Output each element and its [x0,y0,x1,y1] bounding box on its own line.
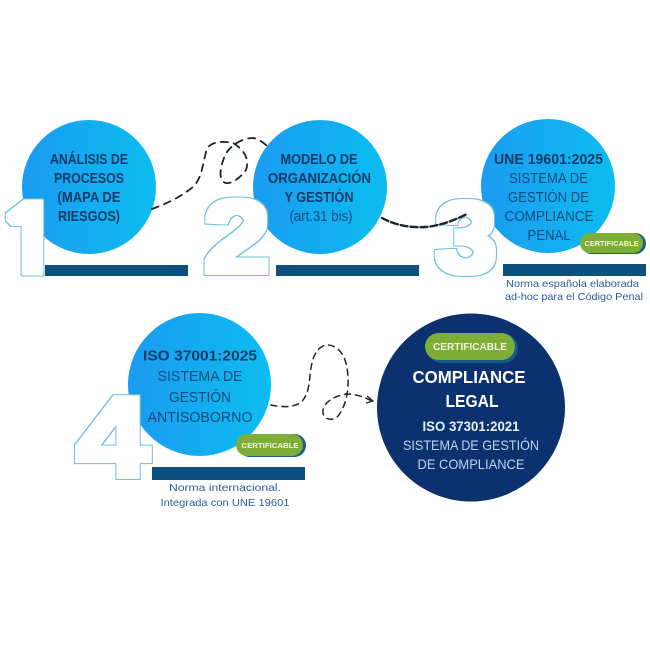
badge 4 [236,434,306,457]
text 1: RIESGOS) [58,209,120,225]
text 4: ISO 37001:2025 [143,348,257,364]
step 1: análisis de procesos [0,120,188,286]
description: SISTEMA DE GESTIÓN [403,437,539,453]
note 4: Integrada con UNE 19601 [160,497,290,509]
note 3 [505,278,643,303]
badge 4: CERTIFICABLE [242,441,298,450]
text 1: PROCESOS [54,171,124,187]
note 3: Norma española elaborada [506,278,639,290]
text 3: SISTEMA DE [509,171,588,187]
numeral 4: 4 [76,375,150,501]
text 3: PENAL [528,228,570,244]
note 3: ad-hoc para el Código Penal [505,291,643,303]
circle 1 [22,120,156,254]
text 1: ANÁLISIS DE [50,151,128,168]
text 1 [50,151,128,225]
arrowhead [366,396,373,403]
step 2: modelo de organización [203,120,419,294]
badge 3 [580,233,646,254]
dark circle [377,314,565,502]
text 2: Y GESTIÓN [284,188,354,206]
text 2 [268,152,371,225]
description [403,418,539,472]
numeral 2: 2 [203,180,270,294]
text 3: GESTIÓN DE [508,189,589,206]
text 2: MODELO DE [280,152,358,168]
heading [412,367,526,411]
text 1: (MAPA DE [58,190,121,206]
text 3: UNE 19601:2025 [494,152,603,168]
circle 4 [128,313,271,456]
circle 2 [253,120,387,254]
text 3: COMPLIANCE [504,209,594,225]
bar 3 [503,264,646,276]
numeral 3: 3 [435,182,497,294]
text 2: (art.31 bis) [290,209,352,225]
step 4: ISO 37001 [76,313,306,509]
description: DE COMPLIANCE [418,456,524,472]
circle 3 [481,119,615,253]
dashed connector 2 to 3 [382,214,467,227]
note 4: Norma internacional. [169,482,281,494]
badge 3: CERTIFICABLE [584,239,638,248]
heading: LEGAL [446,391,499,411]
description: ISO 37301:2021 [422,418,520,434]
badge 5 [425,333,518,363]
step 3: UNE 19601 [435,119,646,303]
dashed connector 4 to compliance legal [271,345,373,419]
dashed connector 1 to 2 [152,138,267,209]
text 4: GESTIÓN [169,389,231,406]
badge 5: CERTIFICABLE [433,342,507,353]
note 4 [160,482,290,509]
compliance legal circle [377,314,565,502]
bar 2 [276,265,419,276]
bar 1 [45,265,188,276]
heading: COMPLIANCE [412,367,526,387]
text 4: ANTISOBORNO [148,410,252,426]
bar 4 [152,467,305,480]
text 4: SISTEMA DE [158,369,243,385]
text 2: ORGANIZACIÓN [268,169,371,187]
text 3 [494,152,603,244]
text 4 [143,348,257,426]
